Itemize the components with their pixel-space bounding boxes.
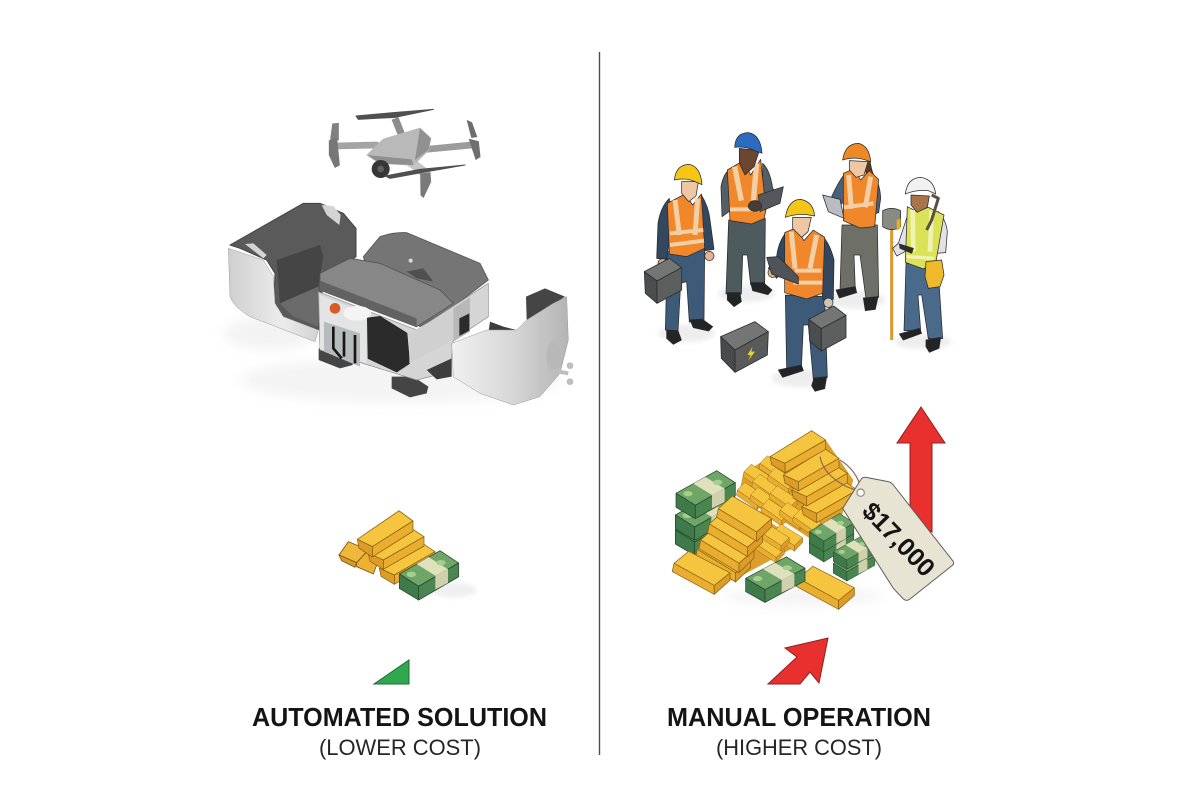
cash stack left [675, 471, 735, 555]
loose gold bars [672, 551, 854, 609]
upper gold pile [736, 431, 857, 538]
worker: white helmet surveyor [883, 177, 947, 352]
worker: blue helmet [721, 133, 783, 307]
cash stacks front [746, 514, 875, 602]
worker: orange helmet [823, 143, 881, 311]
center divider [598, 52, 600, 755]
icon: green arrow, clipped [374, 660, 409, 684]
lower gold pile [696, 496, 803, 582]
icon: small red arrow, clipped [768, 638, 828, 684]
left tray interior [230, 203, 356, 330]
right tray wing [488, 322, 517, 340]
heading: automated solution: AUTOMATED SOLUTION [252, 704, 547, 732]
worker: yellow helmet with battery [644, 164, 714, 344]
subheading: higher cost: (HIGHER COST) [716, 735, 882, 760]
icon: team of workers [644, 133, 952, 391]
icon: drone docking station [223, 203, 573, 405]
control panel [320, 295, 367, 363]
central unit [363, 233, 488, 327]
icon: small pile of gold and cash [339, 511, 477, 600]
icon: battery on ground [721, 322, 768, 372]
worker: yellow helmet center [767, 199, 846, 391]
price tag [820, 457, 954, 600]
feet [319, 348, 353, 368]
icon: large pile of gold and cash [672, 431, 954, 609]
heading: manual operation: MANUAL OPERATION [667, 704, 931, 732]
icon: drone [329, 109, 480, 197]
price text: $17,000 [856, 497, 940, 582]
panel: automated solution [223, 109, 573, 760]
panel: manual operation [644, 133, 954, 760]
icon: large red arrow up [897, 407, 945, 532]
subheading: lower cost: (LOWER COST) [319, 735, 481, 760]
